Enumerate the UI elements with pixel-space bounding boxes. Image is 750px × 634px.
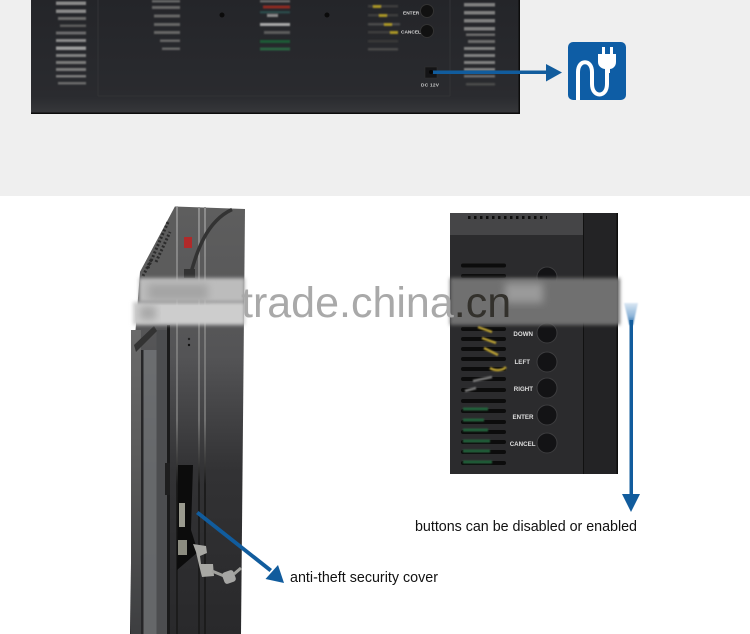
keys and lock bbox=[193, 544, 214, 577]
vent: third, coloured cables bbox=[260, 0, 290, 50]
power jack: DC 12V bbox=[421, 82, 440, 88]
button: left bbox=[515, 352, 557, 372]
button: down bbox=[513, 323, 557, 343]
arrow: security cover bbox=[196, 511, 284, 583]
button: up bbox=[537, 267, 557, 287]
button: enter bbox=[513, 405, 557, 425]
indicator: red switch bbox=[184, 237, 192, 248]
panel: monitor rear bbox=[31, 0, 520, 114]
button: enter: ENTER bbox=[403, 10, 420, 16]
icon: power plug bbox=[568, 42, 626, 100]
watermark text: trade.china.cn bbox=[241, 279, 511, 327]
button: enter: ENTER bbox=[513, 414, 534, 421]
vent: second bbox=[152, 0, 180, 50]
watermark band over close-up bbox=[450, 278, 620, 325]
vent dots bbox=[143, 222, 170, 276]
side vents bbox=[461, 264, 506, 465]
panel: button close-up bbox=[450, 213, 618, 474]
side hinge bbox=[134, 326, 157, 352]
vent: far left bbox=[56, 2, 86, 84]
cables behind vents bbox=[463, 327, 506, 462]
vent: right bbox=[464, 3, 495, 86]
arrow: buttons caption bbox=[622, 303, 640, 512]
button: cancel bbox=[401, 24, 434, 38]
vent: fourth, yellow cables bbox=[368, 5, 400, 50]
panel: side view of monitor bbox=[130, 206, 245, 634]
panel: rear view background bbox=[0, 0, 750, 196]
button: cancel: CANCEL bbox=[401, 30, 421, 36]
button: right: RIGHT bbox=[514, 386, 533, 393]
power cable bbox=[190, 210, 232, 276]
button: enter bbox=[403, 4, 434, 18]
button: left: LEFT bbox=[515, 359, 530, 366]
power jack bbox=[421, 67, 440, 88]
caption: security cover: anti-theft security cover bbox=[290, 570, 438, 586]
button: cancel: CANCEL bbox=[510, 441, 536, 448]
screws bbox=[220, 12, 330, 18]
top dotted vents bbox=[468, 216, 547, 219]
button: right bbox=[514, 378, 557, 398]
watermark band over side view bbox=[133, 278, 245, 325]
side strips bbox=[131, 330, 141, 634]
small holes bbox=[188, 338, 190, 340]
caption: buttons: buttons can be disabled or enabled bbox=[415, 519, 637, 535]
button: cancel bbox=[510, 433, 557, 453]
arrow: power jack to plug icon bbox=[433, 64, 562, 82]
security cover slot bbox=[177, 465, 198, 570]
button: down: DOWN bbox=[513, 331, 534, 338]
